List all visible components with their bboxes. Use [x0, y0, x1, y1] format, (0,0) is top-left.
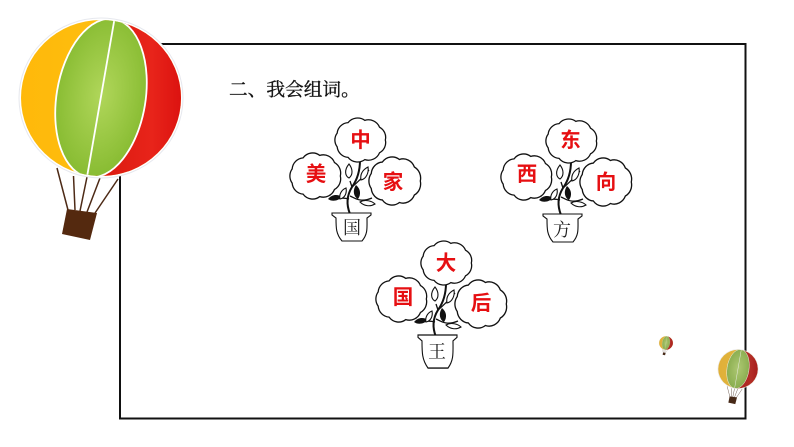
word plant: 方: 东: [560, 128, 581, 152]
tiny distant balloon: [659, 336, 674, 355]
word plant: 方: 西: [517, 163, 537, 186]
word plant: 王: 大: [436, 252, 456, 275]
word plant: 方: 方: [553, 220, 571, 240]
word plant: 王: [376, 241, 507, 368]
word plant: 方: [501, 119, 632, 242]
word plant: 王: 后: [471, 292, 491, 315]
large hot-air balloon: [15, 12, 190, 240]
word plant: 国: 中: [350, 129, 371, 152]
word plant: 国: 家: [383, 170, 404, 194]
word plant: 国: 国: [343, 218, 361, 238]
heading: 二、我会组词。: [229, 80, 360, 101]
word plant: 王: 国: [393, 286, 413, 309]
word plant: 方: 向: [596, 171, 616, 194]
small hot-air balloon: [717, 348, 760, 404]
slide frame: [120, 44, 746, 418]
word plant: 王: 王: [428, 342, 446, 362]
word plant: 国: [290, 118, 421, 241]
word plant: 国: 美: [306, 163, 327, 186]
